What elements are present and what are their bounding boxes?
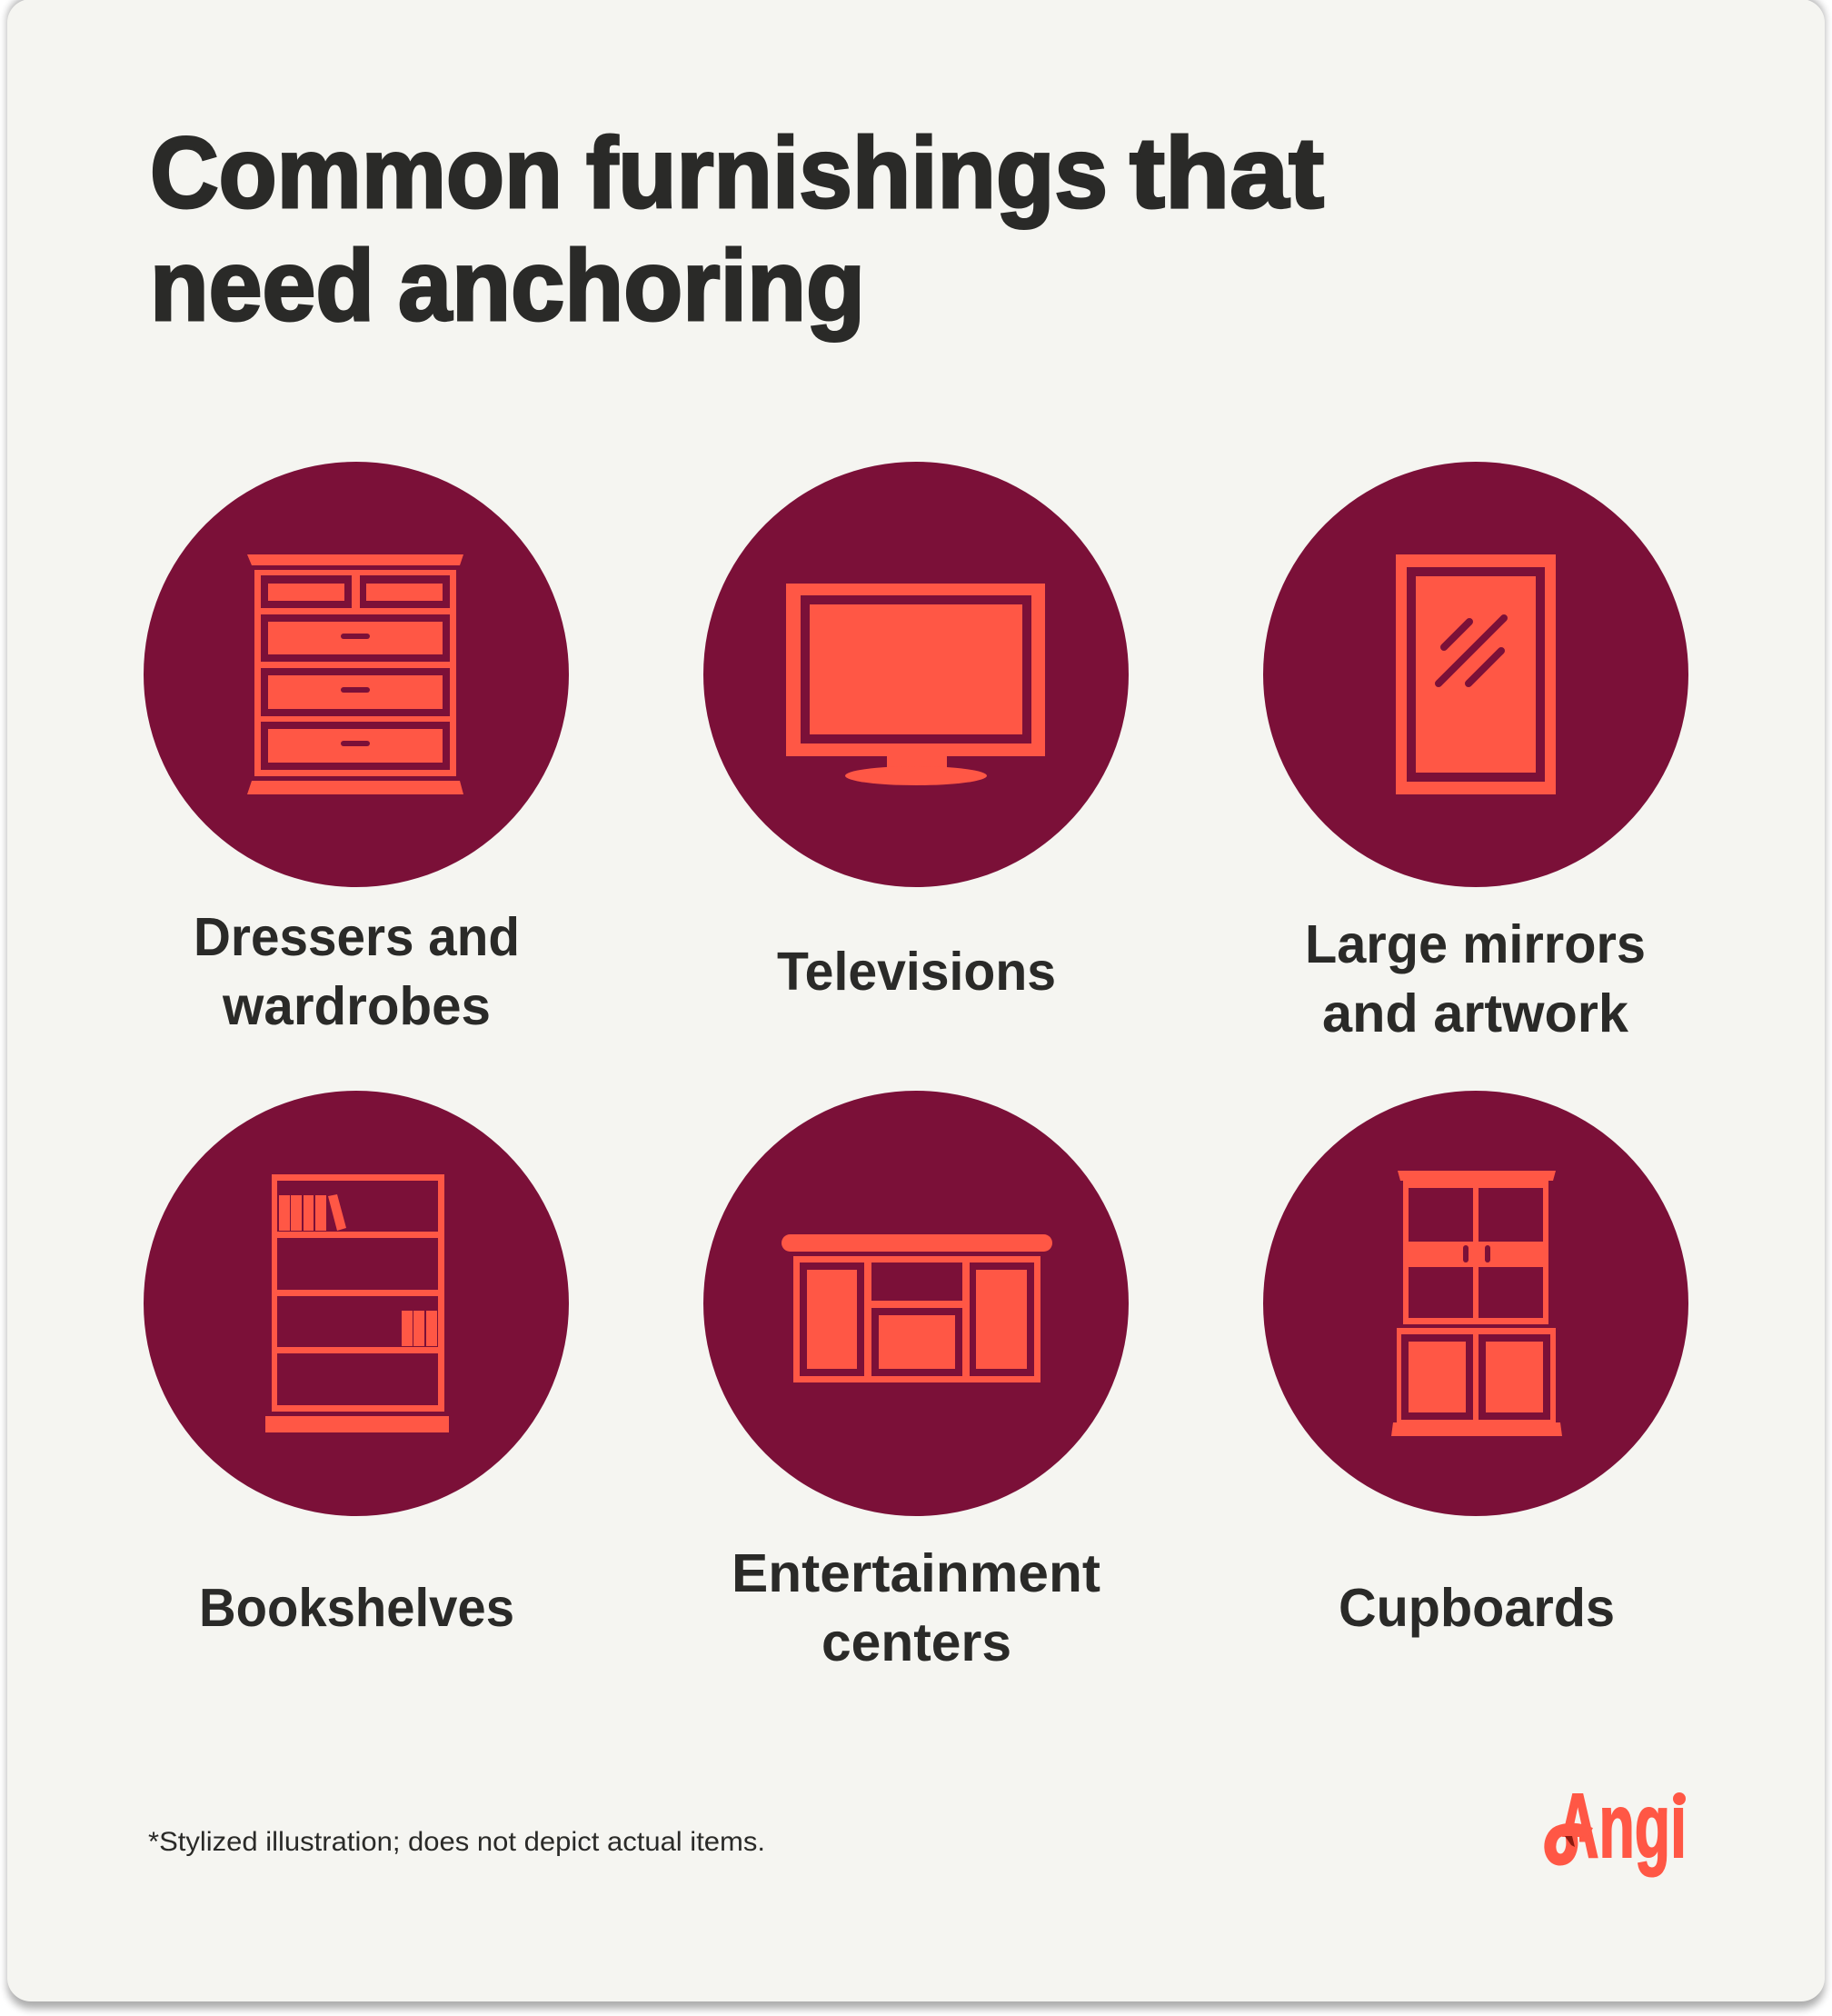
title: need (150, 230, 374, 342)
label: large mirrors and artwork (1305, 914, 1646, 1043)
footnote: *Stylized illustration; does not depict actual items. (148, 1827, 765, 1857)
label: entertainment centers: Entertainment (732, 1543, 1100, 1603)
label: bookshelves: Bookshelves (199, 1578, 514, 1638)
icon: television (703, 462, 1129, 887)
title: that (1130, 117, 1324, 229)
title: Common (150, 117, 563, 229)
label: entertainment centers (732, 1543, 1100, 1672)
label: large mirrors and artwork: Large mirrors (1305, 914, 1646, 974)
panel: televisions (703, 462, 1129, 1002)
title: anchoring (398, 230, 865, 342)
logo: Angi (1550, 1775, 1688, 1877)
icon: bookshelf (144, 1091, 569, 1516)
panel: large mirrors and artwork (1263, 462, 1688, 1043)
label: entertainment centers: centers (821, 1612, 1011, 1672)
logo: Angi: Angi (1557, 1775, 1687, 1877)
panel: bookshelves (144, 1091, 569, 1638)
panel: dressers and wardrobes (144, 462, 569, 1036)
title: furnishings (586, 117, 1108, 229)
panel: entertainment centers (703, 1091, 1129, 1672)
icon: mirror (1263, 462, 1688, 887)
label: televisions: Televisions (777, 942, 1056, 1002)
title (150, 117, 1324, 342)
icon: entertainment center (703, 1091, 1129, 1516)
icon: cupboard (1263, 1091, 1688, 1516)
icon: dresser (144, 462, 569, 887)
label: dressers and wardrobes (194, 907, 520, 1036)
label: cupboards: Cupboards (1339, 1578, 1615, 1638)
label: large mirrors and artwork: and artwork (1322, 983, 1628, 1043)
label: dressers and wardrobes: Dressers and (194, 907, 520, 967)
label: dressers and wardrobes: wardrobes (222, 976, 491, 1036)
panel: cupboards (1263, 1091, 1688, 1638)
